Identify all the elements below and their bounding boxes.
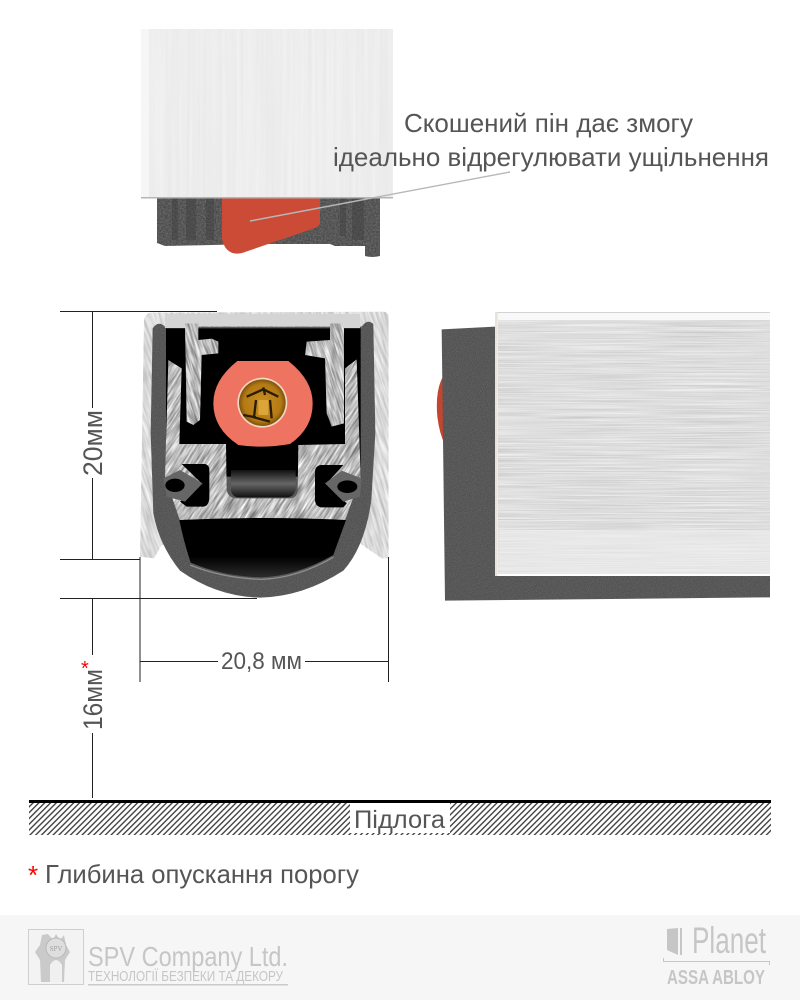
- black interior: [166, 328, 361, 477]
- red pin head: [213, 361, 313, 447]
- dimension label: 20.8 mm: 20,8 мм: [221, 648, 302, 675]
- red pin edge: [437, 376, 445, 444]
- door icon: [667, 928, 682, 955]
- seal body: [157, 198, 380, 257]
- callout text: ідеально відрегулювати ущільнення: [333, 142, 769, 172]
- callout leader line: [250, 172, 510, 221]
- product photo: top view with red pin: [141, 29, 393, 257]
- dimension label: 16 mm: 16мм: [78, 669, 108, 730]
- red asterisk: *: [81, 658, 89, 680]
- bottom cavity: [179, 518, 346, 577]
- left clip with oval: [163, 470, 203, 502]
- footnote: *: [28, 860, 38, 890]
- aluminium face: [495, 312, 770, 576]
- floor line: [29, 800, 771, 803]
- side view of the profile: [437, 312, 770, 601]
- callout text: [333, 108, 769, 172]
- dimension lines: [60, 311, 388, 798]
- footnote: Глибина опускання порогу: [45, 859, 359, 889]
- rubber seal: [151, 322, 375, 598]
- outer aluminium housing: [140, 312, 388, 558]
- rubber seal side: [442, 327, 770, 601]
- SPV emblem: [28, 930, 84, 984]
- cross-section of the profile: [140, 312, 388, 598]
- logo: Planet ASSA ABLOY: [664, 920, 770, 989]
- aluminium carrier: [165, 360, 361, 520]
- logo: Planet ASSA ABLOY: Planet: [692, 920, 767, 961]
- logo: SPV Company: [28, 930, 288, 986]
- floor hatching: [29, 803, 771, 835]
- logo: SPV Company: ТЕХНОЛОГІЇ БЕЗПЕКИ ТА ДЕКОРУ: [88, 968, 283, 985]
- SPV emblem: SPV: [50, 945, 62, 953]
- floor label: Підлога: [354, 806, 445, 834]
- aluminium profile: [141, 29, 393, 198]
- seal grooves: [172, 198, 364, 240]
- logo: Planet ASSA ABLOY: ASSA ABLOY: [667, 967, 765, 989]
- gold screw: [237, 378, 287, 428]
- red adjustment pin: [222, 198, 320, 254]
- callout text: Скошений пін дає змогу: [404, 108, 693, 138]
- top aluminium bridge: [165, 314, 360, 328]
- left slot: [180, 464, 209, 507]
- dimension label: 20 mm: 20мм: [78, 410, 108, 476]
- right slot: [315, 465, 347, 507]
- inner seal highlight: [190, 557, 333, 579]
- aluminium hanging tabs: [185, 324, 344, 426]
- logo: SPV Company: SPV Company Ltd.: [88, 941, 288, 972]
- footer band: [0, 915, 800, 1000]
- center pocket: [231, 470, 296, 497]
- right clip with oval: [325, 471, 362, 502]
